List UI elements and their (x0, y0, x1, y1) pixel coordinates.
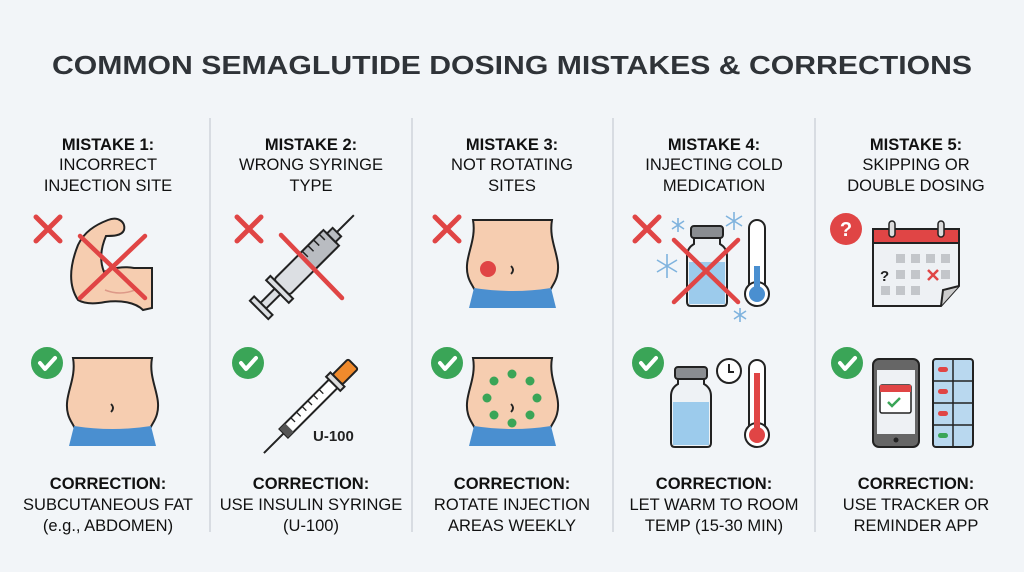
heading 5: SKIPPING OR (862, 156, 970, 174)
panel: mistake 4 (630, 136, 798, 535)
correction 2: CORRECTION: (253, 475, 369, 493)
icon: phone app (873, 359, 919, 447)
heading 1: INCORRECT (59, 156, 157, 174)
heading 3 (451, 136, 573, 195)
heading 4 (645, 136, 783, 195)
icon: x mark (36, 217, 60, 241)
heading 2: TYPE (289, 177, 333, 195)
icon: calendar: ? (880, 268, 889, 285)
correction 5: REMINDER APP (854, 517, 978, 535)
icon: check (632, 347, 664, 379)
icon: pill organizer (933, 359, 973, 447)
heading 4: MISTAKE 4: (668, 136, 760, 154)
icon: abdomen (67, 358, 158, 446)
icon: clock (717, 359, 741, 383)
panel: mistake 1 (23, 136, 193, 535)
correction 3: ROTATE INJECTION (434, 496, 590, 514)
icon: question (830, 213, 862, 245)
icon: cold vial (657, 212, 746, 322)
icon: warm thermometer (745, 360, 769, 447)
icon: x mark (237, 217, 261, 241)
correction 2: (U-100) (283, 517, 339, 535)
panel: mistake 2 (220, 136, 402, 535)
correction 4 (630, 475, 798, 535)
correction 5: CORRECTION: (858, 475, 974, 493)
correction 1: CORRECTION: (50, 475, 166, 493)
correction 3: CORRECTION: (454, 475, 570, 493)
heading 1 (44, 136, 172, 195)
icon: check (31, 347, 63, 379)
correction 4: LET WARM TO ROOM (630, 496, 798, 514)
icon: calendar (873, 221, 959, 306)
heading 2 (239, 136, 383, 195)
heading 3: MISTAKE 3: (466, 136, 558, 154)
heading 5: MISTAKE 5: (870, 136, 962, 154)
correction 2 (220, 475, 402, 535)
icon: check (232, 347, 264, 379)
heading 4: MEDICATION (663, 177, 765, 195)
icon: wrong syringe (248, 204, 365, 321)
label: U-100: U-100 (313, 428, 354, 445)
heading 5: DOUBLE DOSING (847, 177, 985, 195)
correction 3: AREAS WEEKLY (448, 517, 576, 535)
correction 5 (843, 475, 989, 535)
correction 4: TEMP (15-30 MIN) (645, 517, 783, 535)
panel: mistake 3 (431, 136, 590, 535)
icon: arm (71, 219, 152, 310)
icon: x mark (635, 217, 659, 241)
icon: insulin syringe (257, 357, 360, 460)
heading 3: SITES (488, 177, 536, 195)
correction 4: CORRECTION: (656, 475, 772, 493)
icon: x mark (435, 217, 459, 241)
correction 2: USE INSULIN SYRINGE (220, 496, 402, 514)
heading 2: WRONG SYRINGE (239, 156, 383, 174)
heading 5 (847, 136, 985, 195)
correction 5: USE TRACKER OR (843, 496, 989, 514)
icon: belly with rotated sites (467, 358, 558, 446)
icon: question: ? (840, 219, 852, 241)
correction 1 (23, 475, 193, 535)
heading 4: INJECTING COLD (645, 156, 783, 174)
icon: warm vial (671, 367, 711, 447)
correction 3 (434, 475, 590, 535)
icon: check (431, 347, 463, 379)
heading 1: MISTAKE 1: (62, 136, 154, 154)
heading 3: NOT ROTATING (451, 156, 573, 174)
panel: mistake 5 (830, 136, 989, 535)
heading 2: MISTAKE 2: (265, 136, 357, 154)
icon: cold thermometer (745, 220, 769, 306)
icon: check (831, 347, 863, 379)
correction 1: SUBCUTANEOUS FAT (23, 496, 193, 514)
title: COMMON SEMAGLUTIDE DOSING MISTAKES & CORRECTIONS (52, 50, 972, 80)
heading 1: INJECTION SITE (44, 177, 172, 195)
icon: belly with one site (467, 220, 558, 308)
correction 1: (e.g., ABDOMEN) (43, 517, 173, 535)
